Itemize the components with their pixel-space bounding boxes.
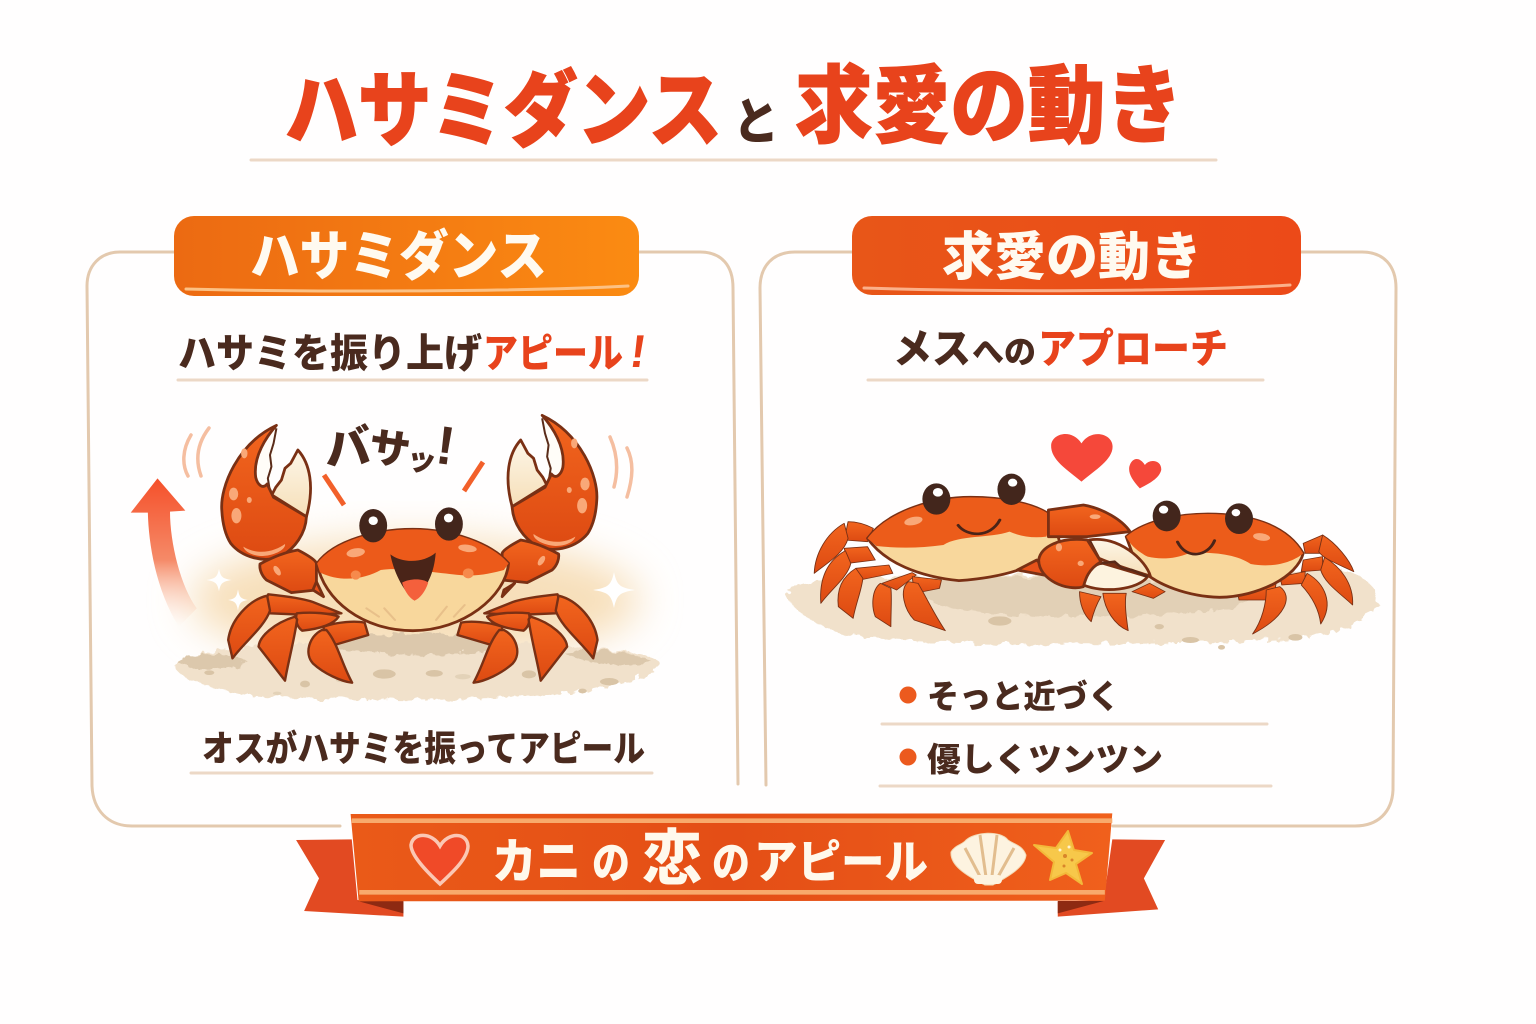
crab B (female) [1080, 501, 1354, 634]
step: 優しくツンツン: 優しくツンツン [927, 741, 1163, 778]
title [285, 60, 1183, 157]
motion lines [184, 428, 632, 497]
subheading right: アプローチ [1038, 326, 1228, 372]
banner text: 恋 [642, 825, 702, 892]
sound effect: バサッ！: バ [323, 420, 373, 475]
illustration: crab raising claws [131, 415, 659, 699]
sand [174, 634, 659, 699]
banner text: の [592, 839, 630, 888]
subheading left: ハサミを振り上げ [178, 332, 482, 376]
title: 求愛の動き [795, 60, 1183, 155]
crab A (male) [814, 474, 1060, 631]
ribbon shape [296, 813, 1165, 917]
header badge left [174, 216, 639, 296]
step: そっと近づく [882, 678, 1267, 724]
banner text: アピール [754, 836, 928, 888]
banner text: カニ [492, 836, 581, 889]
subheading left [178, 325, 650, 380]
banner text [492, 825, 928, 892]
title: ハサミダンス [285, 66, 722, 157]
sand glow [190, 538, 640, 662]
icon: shell [951, 833, 1026, 885]
illustration: two crabs courting [786, 434, 1378, 650]
header badge right: 求愛の動き [942, 229, 1202, 287]
header badge left: ハサミダンス [250, 226, 547, 287]
panel frame left [87, 252, 738, 826]
icon: heart [411, 835, 468, 884]
subheading left: アピール [483, 332, 623, 376]
subheading right: への [972, 334, 1036, 370]
subheading right: メス [893, 326, 971, 372]
title: と [733, 94, 779, 150]
banner text: の [712, 839, 750, 888]
sound effect: バサッ！ [323, 415, 483, 505]
bottom ribbon banner [296, 813, 1165, 917]
icon: starfish [1034, 831, 1092, 884]
crab [222, 415, 597, 683]
panel: 求愛の動き [760, 216, 1396, 826]
step: そっと近づく: そっと近づく [927, 678, 1120, 715]
panel frame right [760, 252, 1396, 826]
header badge right [852, 216, 1301, 295]
sand [786, 570, 1378, 650]
sound effect: バサッ！: ! [432, 415, 459, 477]
hearts [1051, 434, 1161, 488]
sound effect: バサッ！: ッ [404, 442, 439, 480]
caption left: オスがハサミを振ってアピール [202, 728, 645, 769]
reaching claw [1039, 505, 1150, 590]
sparkles [206, 569, 635, 611]
step: 優しくツンツン [880, 741, 1271, 786]
panel: ハサミダンス [87, 216, 738, 826]
up arrow [131, 478, 197, 627]
subheading left: ! [627, 325, 650, 377]
sound effect: バサッ！: サ [366, 424, 413, 475]
subheading right [868, 326, 1263, 380]
